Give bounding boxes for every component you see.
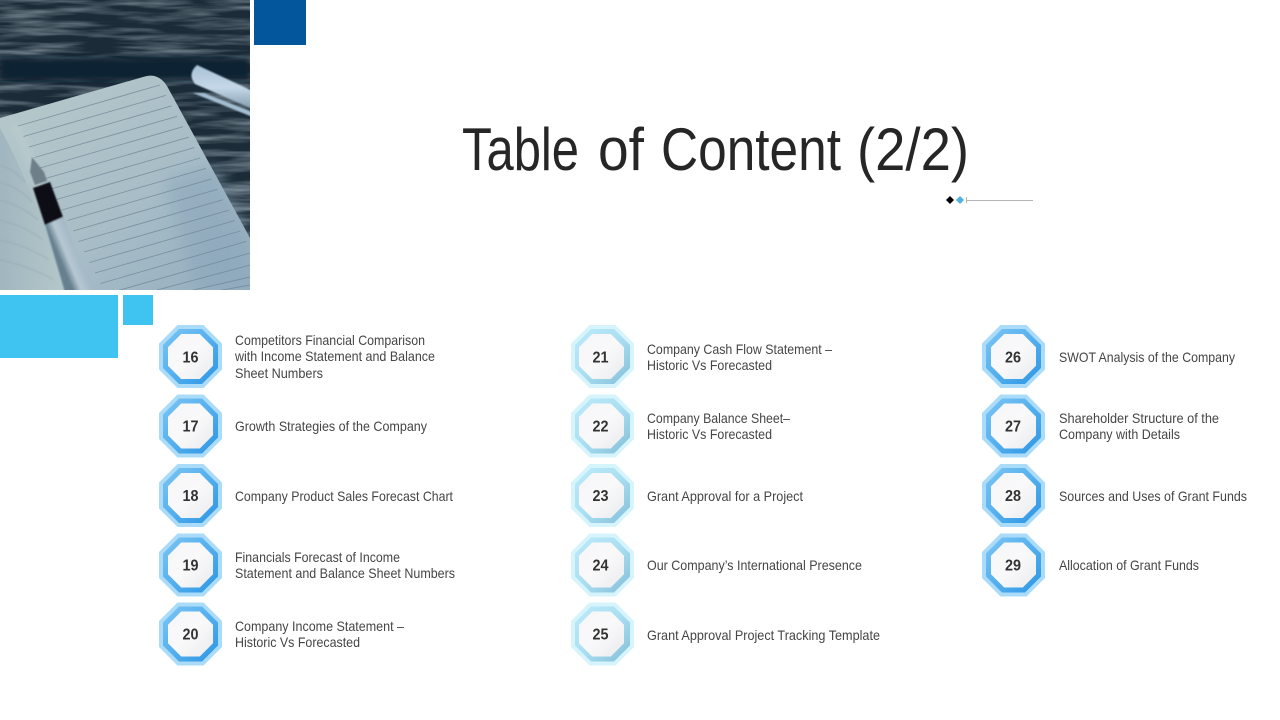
item 22: 22 [592,418,609,436]
item 25 [571,602,880,666]
item 22: Company Balance Sheet– [647,410,790,426]
item 16: Sheet Numbers [235,365,323,381]
item 22 [571,394,790,458]
item 28: Sources and Uses of Grant Funds [1059,488,1247,504]
item 29 [982,534,1199,596]
notebook ruled lines [18,85,250,300]
decorative square: dark blue [254,0,306,45]
item 25: 25 [592,626,609,644]
item 26: 26 [1005,350,1021,366]
title: Content [661,116,841,183]
item 26: SWOT Analysis of the Company [1059,349,1235,365]
fountain pen [30,157,88,290]
item 24: Our Company’s International Presence [647,557,862,573]
notebook right page [0,76,250,295]
item 18: 18 [182,488,199,505]
item 26 [982,325,1235,388]
item 19: Statement and Balance Sheet Numbers [235,565,455,581]
item 28 [982,464,1247,527]
title [462,116,969,183]
item 21: Historic Vs Forecasted [647,357,772,373]
item 21: Company Cash Flow Statement – [647,341,832,357]
title: Table [462,116,579,183]
item 28: 28 [1005,488,1021,505]
item 23 [571,464,803,527]
item 19: 19 [182,558,199,574]
item 16: 16 [182,350,199,366]
item 22: Historic Vs Forecasted [647,426,772,442]
item 20 [159,602,404,666]
item 23: Grant Approval for a Project [647,488,803,504]
item 17: 17 [182,418,199,436]
item 29: 29 [1005,558,1021,574]
item 19: Financials Forecast of Income [235,549,400,565]
item 19 [159,534,455,596]
item 21 [571,325,832,388]
decorative square: light blue small [123,295,153,325]
item 27: Shareholder Structure of the [1059,410,1219,426]
decorative block: light blue large [0,295,118,358]
photo: notebook and fountain pen [0,0,255,300]
item 20: 20 [182,626,199,644]
pen cap [191,65,255,118]
item 29: Allocation of Grant Funds [1059,557,1199,573]
item 16: Competitors Financial Comparison [235,332,425,348]
item 27: 27 [1005,418,1021,436]
item 16 [159,325,435,388]
item 24: 24 [592,558,609,574]
item 18 [159,464,453,527]
title: (2/2) [857,116,969,183]
item 20: Historic Vs Forecasted [235,634,360,650]
title divider [946,196,1033,204]
item 25: Grant Approval Project Tracking Template [647,627,880,643]
notebook left page [0,128,65,295]
item 17 [159,394,427,458]
item 17: Growth Strategies of the Company [235,418,427,434]
item 24 [571,534,862,596]
title: of [598,116,644,183]
item 20: Company Income Statement – [235,618,404,634]
item 16: with Income Statement and Balance [234,348,435,364]
item 21: 21 [592,350,609,366]
item 23: 23 [592,488,609,505]
item 27 [982,394,1219,458]
item 27: Company with Details [1059,426,1180,442]
item 18: Company Product Sales Forecast Chart [235,488,453,504]
